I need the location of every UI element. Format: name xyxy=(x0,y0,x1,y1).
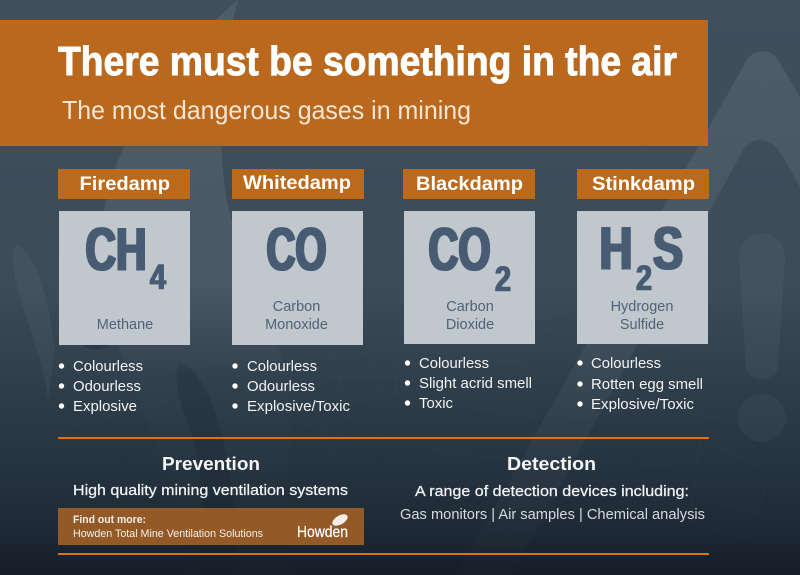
callout: find out more banner xyxy=(58,508,364,545)
card: H2S Hydrogen Sulfide: S xyxy=(653,215,683,282)
properties list: Whitedamp: Explosive/Toxic xyxy=(247,399,350,415)
card: CH4 Methane: CH xyxy=(86,216,146,283)
properties list: Stinkdamp: Colourless xyxy=(591,356,661,372)
heading: Whitedamp: Whitedamp xyxy=(243,173,351,194)
properties list: Stinkdamp: Explosive/Toxic xyxy=(591,397,694,413)
card: CH4 Methane: 4 xyxy=(150,258,166,297)
properties list: Whitedamp: Odourless xyxy=(247,379,315,395)
properties list: Blackdamp: Toxic xyxy=(419,396,453,412)
properties list: Whitedamp: Colourless xyxy=(247,359,317,375)
title: There must be something in the air xyxy=(58,38,677,84)
heading: Stinkdamp: Stinkdamp xyxy=(592,174,695,195)
properties list: Whitedamp xyxy=(232,359,350,415)
properties list: Blackdamp xyxy=(405,356,532,412)
heading: Blackdamp xyxy=(403,169,535,199)
card: CO2 Carbon Dioxide: 2 xyxy=(495,260,511,299)
card: CO Carbon Monoxide: CO xyxy=(266,216,326,283)
panel: Whitedamp xyxy=(232,169,364,415)
panel: Detection xyxy=(400,454,705,523)
card: H2S Hydrogen Sulfide: 2 xyxy=(636,259,652,298)
panel: Stinkdamp xyxy=(577,169,709,413)
heading: Firedamp xyxy=(58,169,190,199)
card: CO2 Carbon Dioxide: Dioxide xyxy=(446,317,494,333)
card: CO2 Carbon Dioxide xyxy=(404,211,535,344)
card: H2S Hydrogen Sulfide xyxy=(577,211,708,344)
card: CH4 Methane: Methane xyxy=(97,317,153,333)
heading: Blackdamp: Blackdamp xyxy=(416,174,523,195)
subtitle: The most dangerous gases in mining xyxy=(62,95,471,125)
heading: Detection: Detection xyxy=(507,454,596,474)
card: CH4 Methane xyxy=(59,211,190,345)
card: H2S Hydrogen Sulfide: Hydrogen xyxy=(611,299,673,315)
properties list: Stinkdamp xyxy=(577,356,703,413)
properties list: Firedamp xyxy=(59,359,143,415)
panel: Firedamp xyxy=(58,169,190,415)
card: H2S Hydrogen Sulfide: H xyxy=(600,215,632,282)
text: detection devices: A range of detection devices including: xyxy=(415,483,689,500)
card: H2S Hydrogen Sulfide: Sulfide xyxy=(620,317,664,333)
properties list: Firedamp: Odourless xyxy=(73,379,141,395)
card: CO Carbon Monoxide: Carbon xyxy=(273,299,320,315)
properties list: Firedamp: Explosive xyxy=(73,399,137,415)
title banner xyxy=(0,20,708,146)
text: detection methods: Gas monitors | Air samples | Chemical analysis xyxy=(400,506,705,523)
panel: Blackdamp xyxy=(403,169,535,412)
heading: Stinkdamp xyxy=(577,169,709,199)
card: CO2 Carbon Dioxide: CO xyxy=(428,216,490,283)
card: CO Carbon Monoxide xyxy=(232,211,363,345)
heading: Prevention: Prevention xyxy=(162,454,260,474)
heading: Whitedamp xyxy=(232,169,364,199)
callout: find out more banner: Find out more: xyxy=(73,514,146,526)
properties list: Blackdamp: Colourless xyxy=(419,356,489,372)
callout: find out more banner: Howden Total Mine Ventilation Solutions xyxy=(73,528,263,540)
card: CO2 Carbon Dioxide: Carbon xyxy=(446,299,494,315)
panel: Prevention xyxy=(58,454,364,545)
logo: Howden: Howden xyxy=(297,524,348,541)
logo: Howden xyxy=(297,512,350,541)
properties list: Firedamp: Colourless xyxy=(73,359,143,375)
text: ventilation systems: High quality mining ventilation systems xyxy=(73,482,348,499)
heading: Firedamp: Firedamp xyxy=(80,174,170,195)
card: CO Carbon Monoxide: Monoxide xyxy=(265,317,328,333)
properties list: Stinkdamp: Rotten egg smell xyxy=(591,377,703,393)
properties list: Blackdamp: Slight acrid smell xyxy=(419,376,532,392)
